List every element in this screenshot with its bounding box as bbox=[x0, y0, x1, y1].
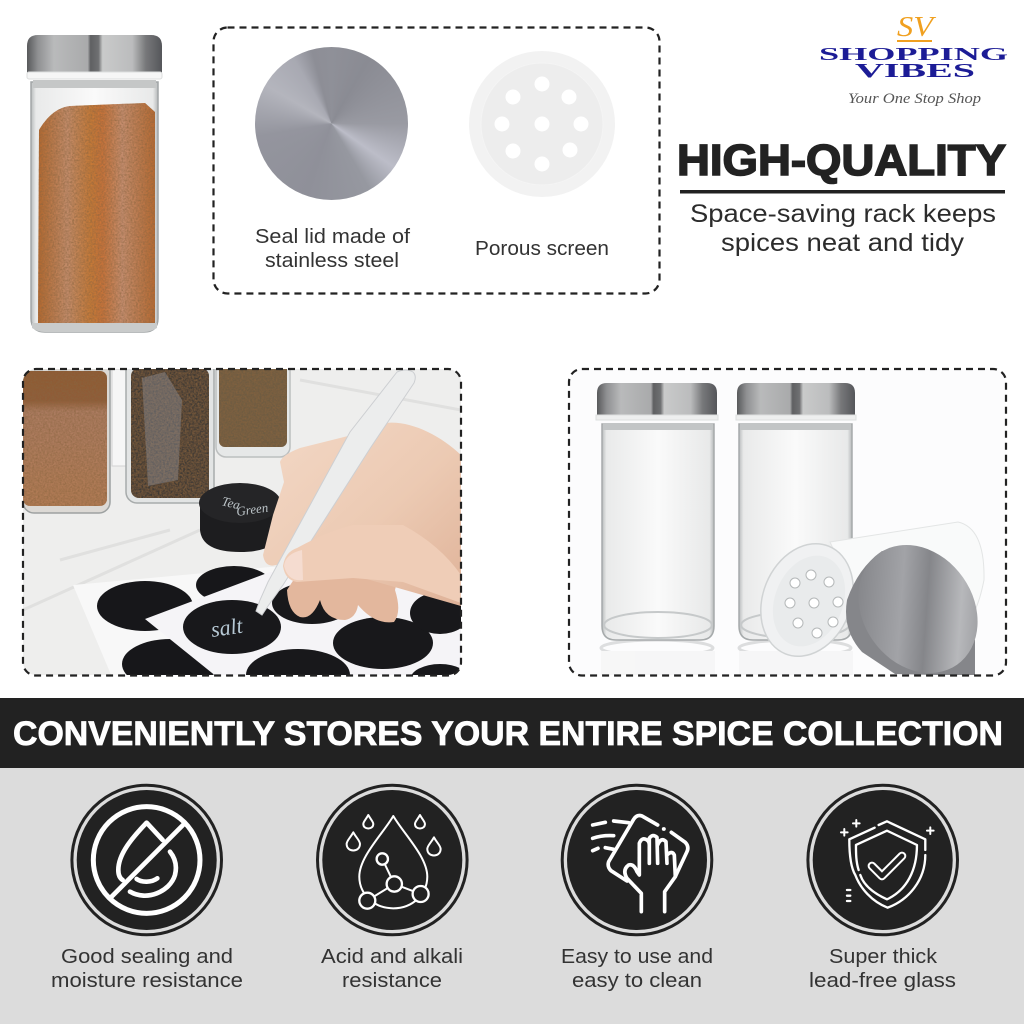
caption: stainless steel: stainless steel bbox=[265, 250, 399, 272]
jars on the table bbox=[23, 360, 290, 513]
jar lying on its side bbox=[760, 522, 984, 675]
banner bbox=[0, 698, 1024, 768]
icon: porous screen bbox=[469, 51, 615, 197]
caption: Good sealing and bbox=[61, 946, 233, 968]
sticker sheets: salt bbox=[209, 613, 245, 642]
subheading: Space-saving rack keeps bbox=[690, 200, 996, 228]
icon: drop with molecule bbox=[318, 785, 467, 935]
feature: acid and alkali resistance bbox=[318, 785, 467, 992]
feature: lead-free glass bbox=[808, 785, 958, 992]
caption: Easy to use and bbox=[561, 946, 713, 968]
caption: Super thick bbox=[829, 946, 938, 968]
caption line 2: lead-free glass bbox=[809, 970, 956, 992]
reflections bbox=[600, 640, 852, 651]
caption line 2: resistance bbox=[342, 970, 442, 992]
icon: stainless steel lid disc bbox=[255, 47, 408, 200]
glass jar right bbox=[736, 383, 856, 640]
logo: Shopping Vibes: VIBES bbox=[855, 60, 975, 82]
caption: Acid and alkali bbox=[321, 946, 463, 968]
caption line 2: moisture resistance bbox=[51, 970, 243, 992]
black lid with chalk writing: Green bbox=[235, 500, 269, 519]
panel: labelling photo bbox=[22, 368, 462, 677]
logo: Shopping Vibes: SV bbox=[897, 12, 936, 43]
subheading bbox=[690, 200, 996, 257]
product photo: spice jar bbox=[27, 35, 162, 332]
sticker sheets bbox=[74, 566, 461, 675]
panel: glass jars photo bbox=[569, 369, 1006, 696]
black lid with chalk writing: Tea bbox=[220, 493, 242, 512]
logo: Shopping Vibes: Your One Stop Shop bbox=[848, 91, 982, 107]
icon: shield with check mark bbox=[808, 785, 958, 935]
feature: easy to clean bbox=[561, 785, 713, 992]
heading: High-Quality: HIGH-QUALITY bbox=[677, 136, 1006, 185]
icon: crossed-out water drop bbox=[72, 785, 222, 935]
feature: moisture resistance bbox=[51, 785, 243, 992]
features section background bbox=[0, 768, 1024, 1024]
glass jar left bbox=[596, 383, 718, 640]
caption: seal lid: Seal lid made of bbox=[255, 226, 410, 248]
caption: porous screen: Porous screen bbox=[475, 238, 609, 260]
subheading: spices neat and tidy bbox=[721, 229, 965, 257]
lower fingers bbox=[287, 578, 398, 622]
icon: hand wiping with cloth bbox=[562, 785, 712, 935]
caption line 2: easy to clean bbox=[572, 970, 702, 992]
banner: CONVENIENTLY STORES YOUR ENTIRE SPICE COLLECTION bbox=[13, 715, 1003, 753]
logo: Shopping Vibes bbox=[819, 12, 1008, 107]
panel: lid and screen features bbox=[214, 28, 660, 294]
black lid with chalk writing bbox=[199, 483, 281, 552]
heading rule bbox=[680, 190, 1005, 194]
logo: Shopping Vibes: SHOPPING bbox=[819, 44, 1008, 64]
hand holding pen bbox=[256, 370, 461, 622]
